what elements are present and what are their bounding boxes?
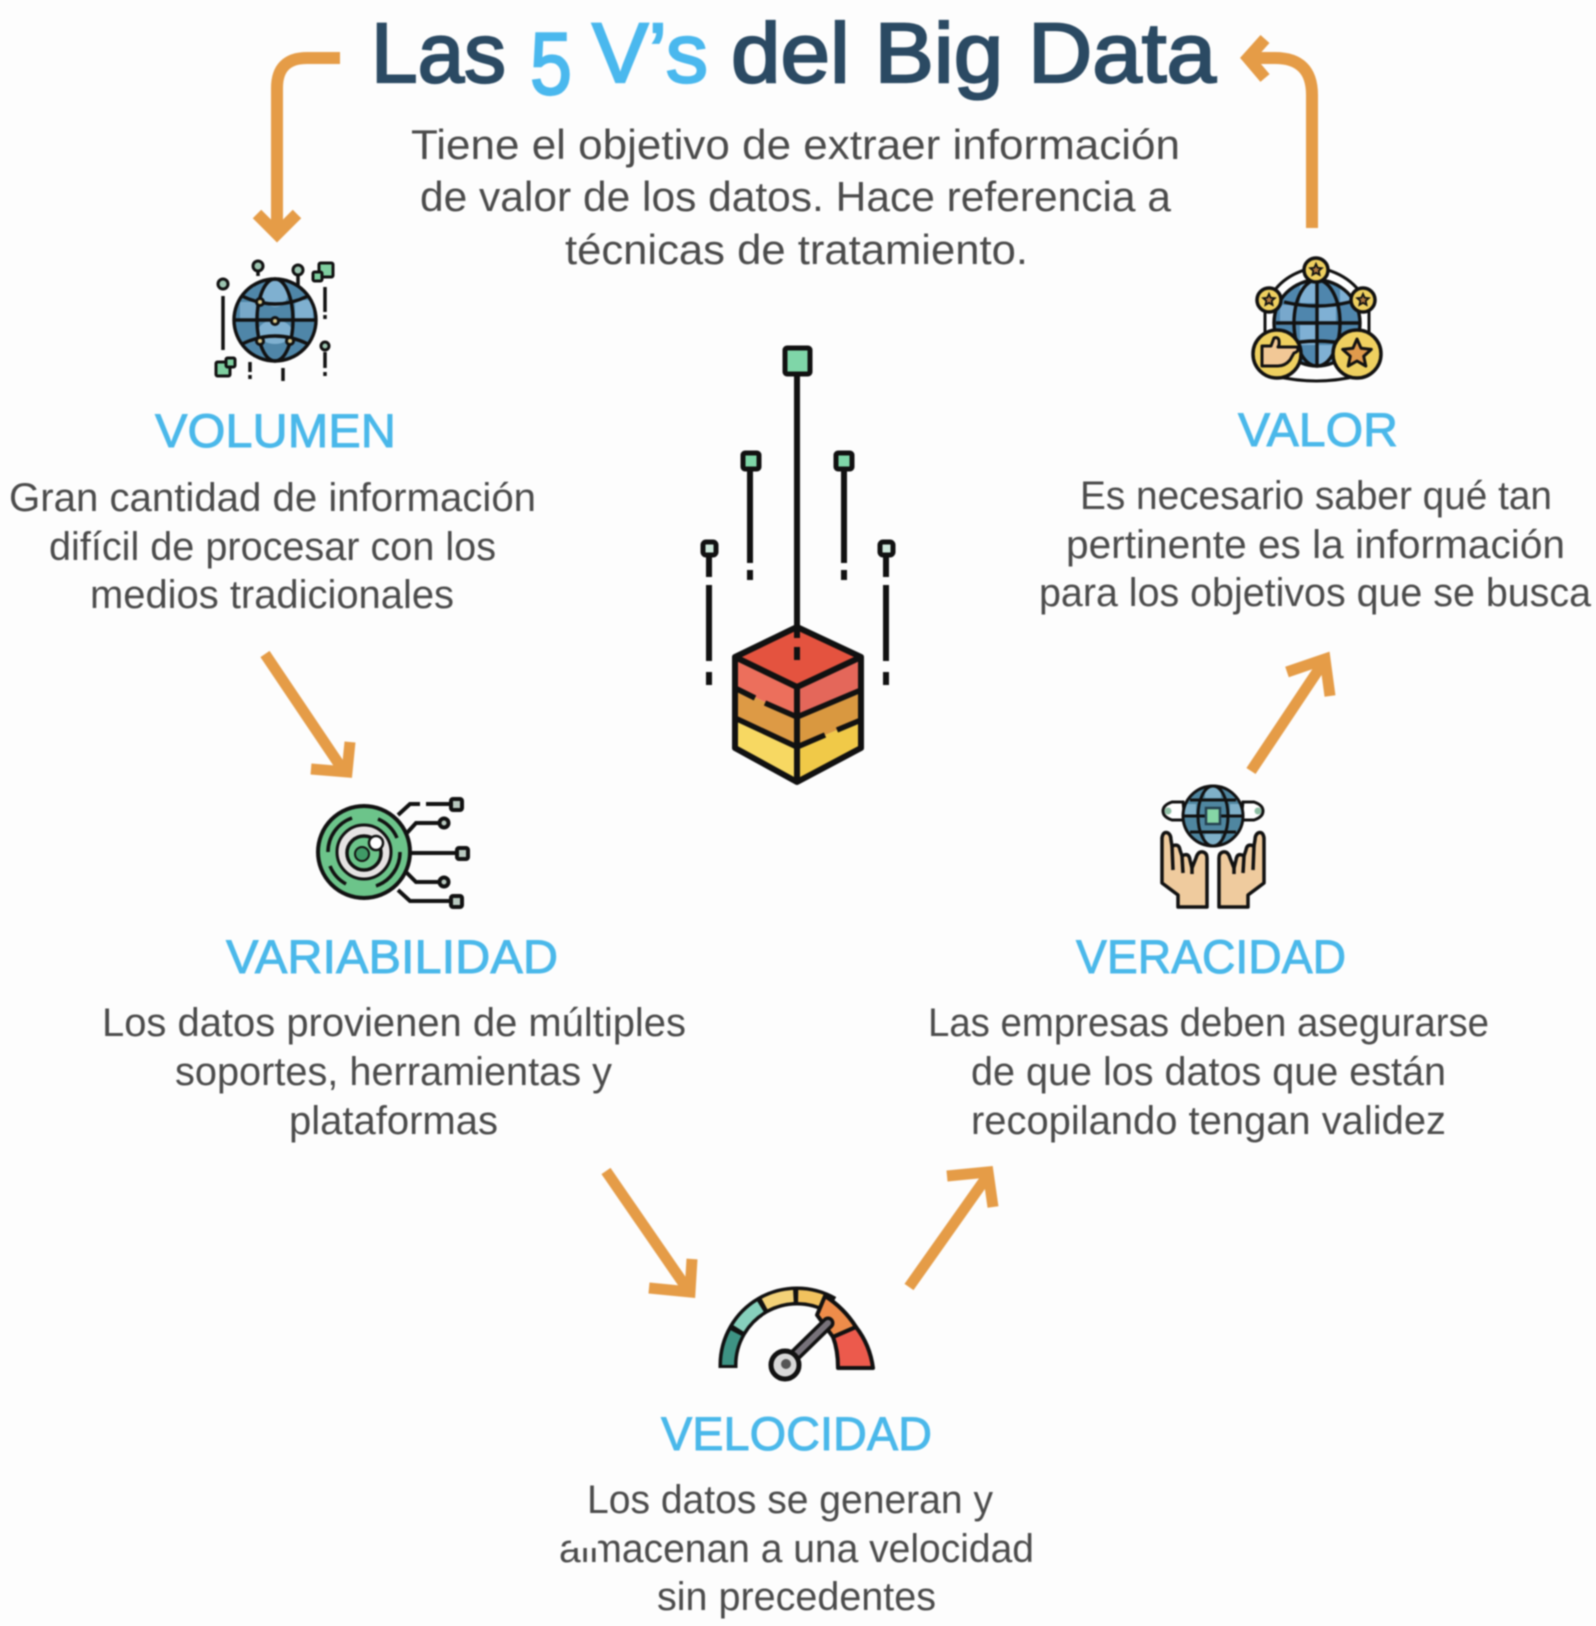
title: 5	[530, 14, 572, 113]
text: veracidad description: recopilando tengan validez	[971, 1099, 1446, 1143]
heading: veracidad: VERACIDAD	[1076, 930, 1346, 983]
title: Las	[371, 6, 506, 100]
heading: variabilidad: VARIABILIDAD	[226, 930, 558, 983]
arrow: title to volumen	[257, 58, 340, 234]
panel: veracidad	[928, 786, 1489, 1143]
arrow: variabilidad to velocidad	[606, 1171, 692, 1292]
text: velocidad description: almacenan a una velocidad	[559, 1527, 1034, 1571]
icon: globe with nodes	[216, 261, 333, 381]
text: variabilidad description	[102, 1001, 686, 1143]
text: veracidad description: Las empresas deben asegurarse	[928, 1001, 1489, 1045]
text: valor description: Es necesario saber qué tan	[1080, 474, 1552, 518]
intro text: Tiene el objetivo de extraer información	[411, 121, 1180, 168]
icon: circular sensor with connectors	[318, 799, 468, 907]
panel: volumen	[9, 261, 536, 617]
text: velocidad description: Los datos se generan y	[587, 1478, 993, 1522]
intro text: de valor de los datos. Hace referencia a	[420, 173, 1172, 220]
text: valor description: para los objetivos que se busca	[1039, 571, 1592, 615]
title	[371, 6, 1216, 113]
text: veracidad description: de que los datos que están	[971, 1050, 1446, 1094]
intro text	[411, 121, 1180, 273]
text: valor description	[1039, 474, 1592, 615]
panel: velocidad	[559, 1296, 1034, 1619]
text: variabilidad description: soportes, herramientas y	[175, 1050, 612, 1094]
arrow: valor to title	[1248, 39, 1312, 228]
title: del Big Data	[731, 6, 1216, 100]
text: veracidad description	[928, 1001, 1489, 1143]
text: volumen description: medios tradicionales	[90, 573, 454, 617]
text: velocidad description: sin precedentes	[657, 1575, 936, 1619]
arrow: veracidad to valor	[1251, 659, 1330, 771]
arrow: velocidad to veracidad	[909, 1172, 993, 1287]
text: volumen description: Gran cantidad de información	[9, 476, 536, 520]
heading: valor: VALOR	[1238, 403, 1398, 456]
text: velocidad description	[559, 1478, 1034, 1619]
text: volumen description	[9, 476, 536, 617]
text: variabilidad description: plataformas	[289, 1099, 498, 1143]
text: volumen description: difícil de procesar con los	[49, 525, 496, 569]
icon: speedometer gauge	[728, 1296, 873, 1379]
panel: valor	[1039, 258, 1592, 615]
heading: volumen: VOLUMEN	[155, 404, 396, 457]
text: valor description: pertinente es la información	[1066, 523, 1565, 567]
text: variabilidad description: Los datos provienen de múltiples	[102, 1001, 686, 1045]
arrow: volumen to variabilidad	[265, 654, 350, 772]
icon: hands holding globe	[1162, 786, 1264, 907]
heading: velocidad: VELOCIDAD	[661, 1407, 932, 1460]
title: V’s	[592, 6, 708, 100]
panel: variabilidad	[102, 799, 686, 1143]
icon: globe with rating badges	[1253, 258, 1381, 381]
intro text: técnicas de tratamiento.	[565, 226, 1028, 273]
icon: central data cube	[703, 348, 893, 782]
